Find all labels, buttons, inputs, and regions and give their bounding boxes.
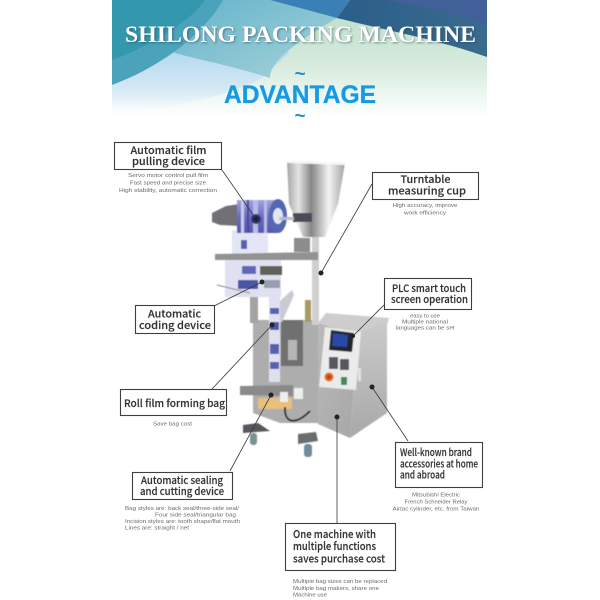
callout: automatic coding device: [136, 280, 264, 334]
callout: turntable measuring cup: High accuracy, improve: [392, 203, 458, 209]
callout: well-known brand accessories: Well-known brand: [400, 444, 472, 459]
machine: cabinet right side: [350, 320, 387, 438]
title: SHILONG PACKING MACHINE: [125, 22, 476, 47]
callout: automatic sealing and cutting device: Lines are: straight / net: [125, 526, 189, 532]
callout: one machine with multiple functions: Machine use: [293, 592, 327, 598]
callout: automatic film pulling device: Servo motor control pull film: [128, 173, 208, 179]
callout: automatic sealing and cutting device: Bag styles are: back seal/three-side seal/: [125, 506, 239, 512]
callout: one machine with multiple functions: One machine with: [293, 526, 376, 542]
callout: one machine with multiple functions: Multiple bag sizes can be replaced: [293, 579, 387, 585]
machine: cable: [285, 407, 310, 421]
subtitle: advantage: [224, 64, 376, 127]
callout: PLC smart touch screen operation: easy to use: [410, 314, 440, 320]
callout: automatic film pulling device: High stability, automatic correction: [119, 188, 217, 194]
callout: turntable measuring cup: measuring cup: [388, 182, 466, 198]
machine: cross bar: [215, 252, 318, 260]
callout: turntable measuring cup: work efficiency: [403, 210, 446, 216]
callout: well-known brand accessories: Airtac cylinder, etc. from Taiwan: [392, 506, 480, 512]
subtitle: advantage: ADVANTAGE: [224, 81, 376, 109]
subtitle: advantage: ~: [294, 64, 306, 85]
machine: film tube: [269, 296, 280, 382]
callout: automatic sealing and cutting device: and cutting device: [140, 483, 224, 498]
machine: forming section: [281, 320, 303, 366]
callout: turntable measuring cup: Turntable: [400, 171, 451, 186]
callout: PLC smart touch screen operation: screen operation: [391, 291, 468, 306]
callout: well-known brand accessories: Mitsubishi Electric: [412, 492, 460, 498]
machine: touch screen: [329, 330, 354, 352]
callout: one machine with multiple functions: Multiple bag makers, share one: [293, 586, 379, 592]
machine: cabinet top: [318, 313, 389, 335]
callout: automatic sealing and cutting device: Automatic sealing: [141, 472, 223, 487]
machine: left caster: [243, 423, 270, 445]
machine: film below roll: [225, 230, 282, 297]
callout: PLC smart touch screen operation: PLC smart touch: [392, 280, 466, 295]
callout: automatic sealing and cutting device: Four side seal/triangular bag: [155, 512, 236, 518]
subtitle: advantage: ~: [294, 106, 306, 127]
callout: PLC smart touch screen operation: languages can be set: [396, 326, 455, 332]
callout: PLC smart touch screen operation: [351, 278, 472, 338]
machine: hopper throat: [294, 238, 310, 252]
callout: automatic coding device: coding device: [139, 317, 211, 332]
callout: one machine with multiple functions: multiple functions: [293, 538, 376, 554]
callout: automatic film pulling device: Automatic film: [130, 142, 206, 157]
callout: automatic film pulling device: [114, 142, 258, 222]
callout: automatic sealing and cutting device: Incision styles are: tooth shape/flat mouth: [125, 519, 240, 525]
machine: cabinet front: [318, 323, 358, 438]
callout: roll film forming bag: [120, 322, 274, 428]
callout: automatic film pulling device: pulling device: [132, 153, 205, 168]
machine: buttons: [324, 357, 349, 385]
machine: hopper: [287, 161, 345, 237]
callout: well-known brand accessories: [370, 384, 482, 512]
callout: one machine with multiple functions: [286, 414, 396, 598]
callout: well-known brand accessories: and abroad: [400, 466, 445, 482]
callout: PLC smart touch screen operation: Multiple national: [402, 320, 448, 326]
callout: roll film forming bag: Roll film forming bag: [124, 395, 225, 410]
callout: roll film forming bag: Save bag cost: [153, 422, 192, 428]
callout: automatic film pulling device: Fast speed and precise size: [130, 180, 206, 186]
packing machine illustration: [212, 161, 389, 457]
machine: sealing unit: [240, 385, 303, 409]
callout: automatic sealing and cutting device: [125, 392, 274, 532]
callout: one machine with multiple functions: saves purchase cost: [293, 550, 386, 566]
machine: tray: [217, 285, 250, 293]
machine: film roll: [237, 199, 294, 233]
callout: well-known brand accessories: French Schneider Relay: [404, 500, 468, 506]
machine: motor: [212, 204, 240, 226]
machine: roller arm: [293, 213, 312, 222]
machine: control panel: [319, 327, 361, 390]
callout: well-known brand accessories: accessories at home: [400, 456, 478, 470]
callout: automatic coding device: Automatic: [148, 306, 201, 320]
machine: cabinet left back panel: [253, 320, 318, 423]
machine: funnel: [270, 290, 294, 322]
machine: columns: [250, 213, 319, 325]
callout: turntable measuring cup: [318, 171, 478, 276]
header banner: [112, 0, 487, 116]
machine: right caster: [298, 432, 318, 457]
